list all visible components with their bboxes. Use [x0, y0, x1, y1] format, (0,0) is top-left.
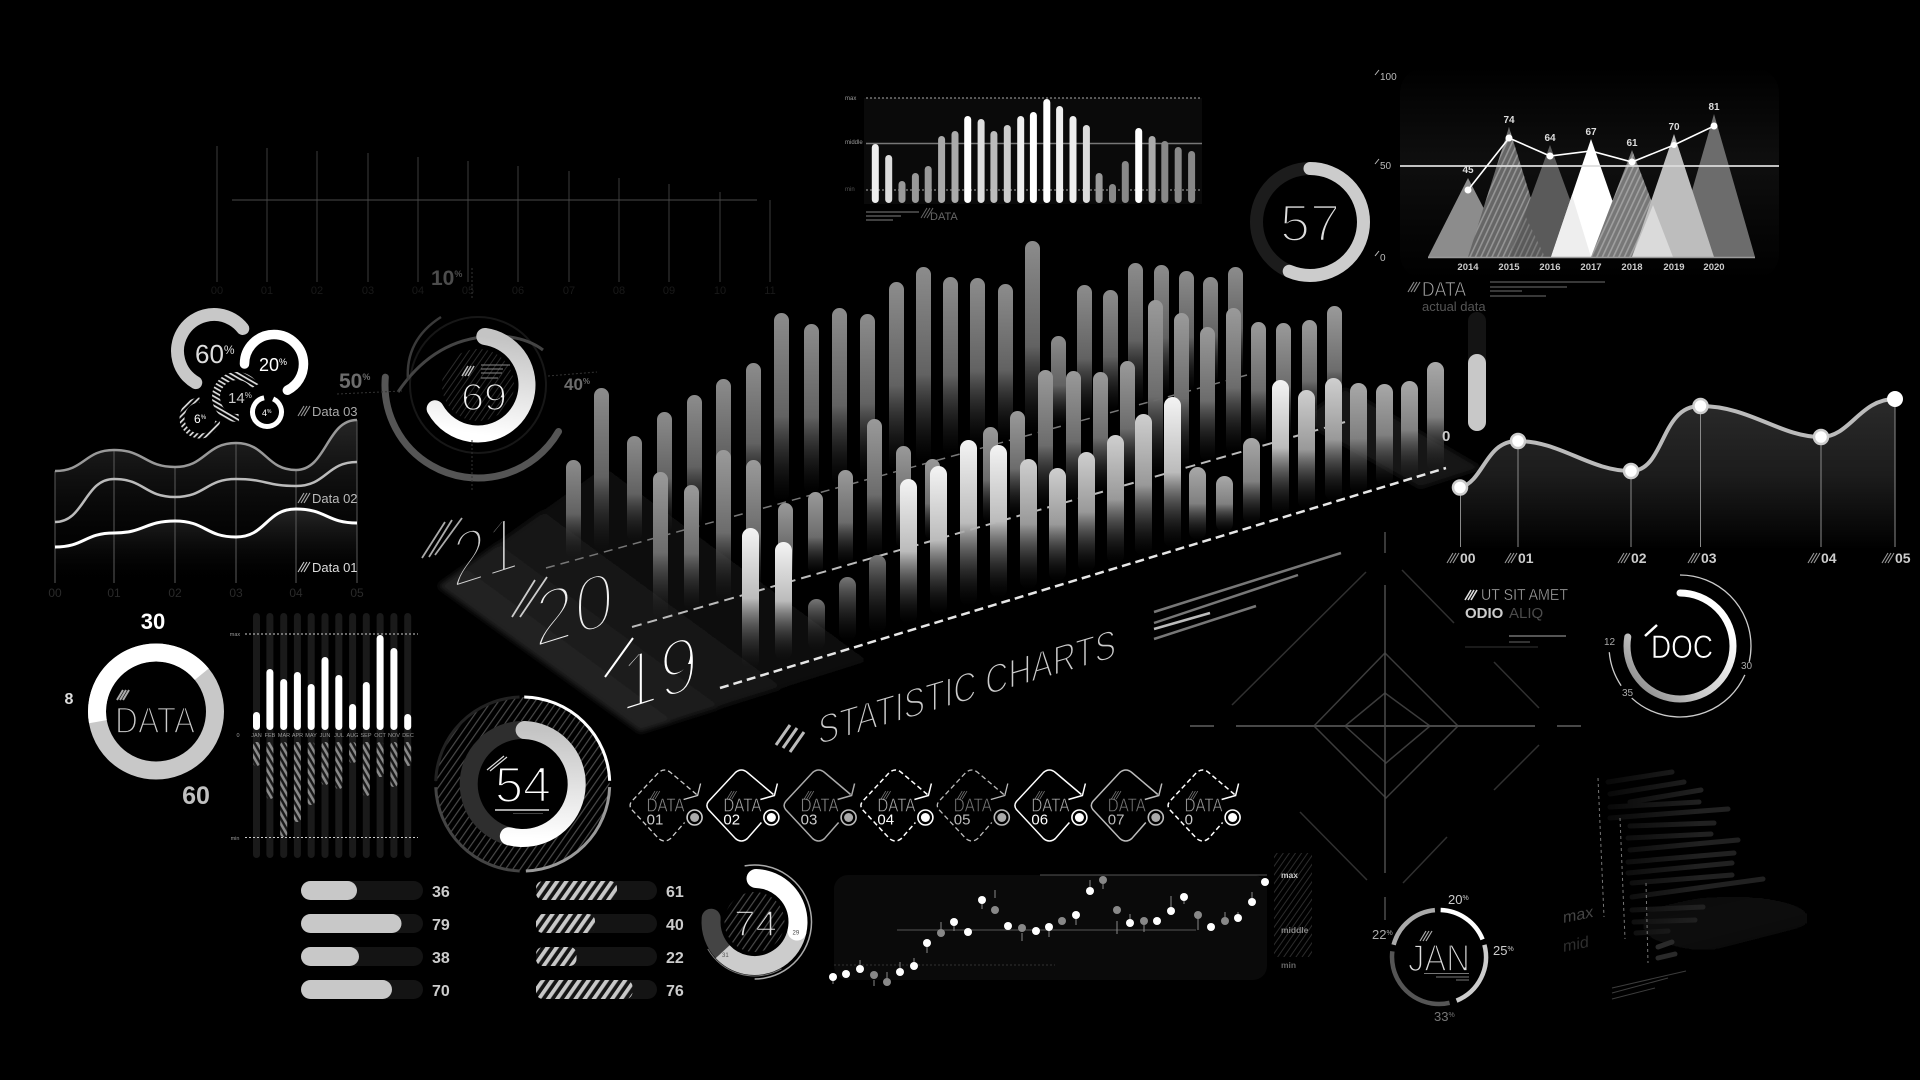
- right area line chart: 01: [1518, 550, 1534, 566]
- gauge 74: 31: [722, 953, 729, 959]
- data diamond 05: [937, 770, 1009, 841]
- triangle chart axis labels: 0: [1380, 253, 1386, 264]
- triangle chart panel: 2018: [1621, 262, 1643, 273]
- vertical pill gauge: [1442, 312, 1486, 445]
- title: statistic charts: [776, 620, 1116, 754]
- horizontal progress bars, solid: 70: [432, 983, 450, 1000]
- donut cluster: 60, 20, 14, 6, 4 percent: 6: [194, 412, 201, 426]
- DATA ring gauge with 30, 8, 60: 60: [182, 782, 210, 810]
- gauge 54: 54: [495, 757, 551, 813]
- 3D bar chart: middle axis dashed line: [632, 422, 1345, 627]
- horizontal progress bars, hatched: 22: [666, 950, 684, 967]
- data diamond 08: [1168, 770, 1240, 841]
- scatter candlestick chart: max: [1281, 870, 1298, 880]
- data diamond 06: DATA: [1031, 796, 1069, 816]
- gauge 69 with percent labels: 50: [339, 370, 362, 393]
- wave line chart with three data series: 02: [168, 586, 182, 600]
- year label 21: [422, 497, 520, 607]
- background grid with vertical timeline lines: 02: [311, 285, 323, 297]
- background grid with vertical timeline lines: 11: [764, 285, 776, 297]
- triangle chart panel: 2016: [1539, 262, 1561, 273]
- data diamond 01: [630, 770, 702, 841]
- horizontal progress bars, hatched: 61: [666, 884, 684, 901]
- background grid with vertical timeline lines: 06: [512, 285, 524, 297]
- donut cluster: 60, 20, 14, 6, 4 percent: %: [201, 415, 207, 421]
- right area line chart: 04: [1821, 550, 1837, 566]
- horizontal progress bars, solid: 38: [432, 950, 450, 967]
- radar diamond chart: [1190, 532, 1581, 920]
- background grid with vertical timeline lines: 00: [211, 285, 223, 297]
- scatter candlestick chart: middle: [1281, 925, 1309, 935]
- 3D bar chart: middle row: [653, 300, 1342, 619]
- decorative title text lines: [1154, 553, 1341, 639]
- data diamond 03: [784, 770, 856, 841]
- triangle chart panel: 74: [1503, 115, 1515, 126]
- background grid with vertical timeline lines: [211, 146, 776, 297]
- right area line chart: 02: [1631, 550, 1647, 566]
- data diamond 02: 02: [723, 812, 740, 828]
- triangle chart panel: 81: [1708, 102, 1720, 113]
- data diamond 02: DATA: [723, 796, 761, 816]
- wave line chart with three data series: 04: [289, 586, 303, 600]
- triangle chart axis labels: [1375, 70, 1397, 264]
- JAN ring with percentages: 22: [1372, 927, 1386, 942]
- text block: ut sit amet: ODIO: [1465, 605, 1504, 622]
- JAN ring with percentages: %: [1386, 930, 1393, 937]
- monthly bar chart: APR: [292, 733, 303, 739]
- right area line chart: [1447, 391, 1911, 566]
- background grid with vertical timeline lines: 09: [663, 285, 675, 297]
- background grid with vertical timeline lines: 03: [362, 285, 374, 297]
- top center bar chart panel: DATA: [930, 211, 958, 223]
- monthly bar chart: [230, 613, 418, 858]
- data diamond 08: DATA: [1185, 796, 1223, 816]
- data diamond 05: 05: [954, 812, 970, 828]
- 3D bar chart: back row: [566, 241, 1243, 558]
- title: statistic charts: STATISTIC CHARTS: [818, 620, 1116, 754]
- background grid with vertical timeline lines: 07: [563, 285, 575, 297]
- gauge 74: [681, 848, 828, 996]
- gauge 69 with percent labels: %: [454, 269, 462, 279]
- data diamond 04: 04: [877, 812, 894, 828]
- data diamond 07: DATA: [1108, 796, 1146, 816]
- triangle chart panel: 2020: [1703, 262, 1725, 273]
- horizontal progress bars, hatched: [536, 881, 684, 1000]
- data diamond 07: 07: [1108, 812, 1124, 828]
- data diamond 07: [1091, 770, 1163, 841]
- monthly bar chart: DEC: [402, 733, 414, 739]
- gauge 69 with percent labels: 69: [461, 377, 507, 419]
- scatter candlestick chart: min: [1281, 960, 1296, 970]
- triangle chart axis labels: 100: [1380, 72, 1397, 83]
- DATA ring gauge with 30, 8, 60: [65, 609, 224, 810]
- triangle chart panel: 2017: [1580, 262, 1602, 273]
- top center bar chart panel: [845, 96, 1202, 223]
- donut cluster: 60, 20, 14, 6, 4 percent: 4: [262, 408, 267, 418]
- right area line chart: 00: [1460, 550, 1476, 566]
- donut cluster: 60, 20, 14, 6, 4 percent: %: [245, 391, 252, 400]
- background grid with vertical timeline lines: 01: [261, 285, 273, 297]
- monthly bar chart: MAR: [278, 733, 290, 739]
- DOC ring gauge: 12: [1604, 637, 1616, 648]
- donut cluster: 60, 20, 14, 6, 4 percent: %: [279, 357, 287, 367]
- donut cluster: 60, 20, 14, 6, 4 percent: %: [267, 409, 272, 415]
- perspective hidden bar chart bottom right: [1537, 772, 1920, 999]
- monthly bar chart: FEB: [265, 733, 276, 739]
- vertical pill gauge: 0: [1442, 428, 1450, 445]
- data diamond 08: 0: [1185, 812, 1193, 828]
- wave line chart with three data series: Data 03: [312, 404, 358, 419]
- 3D bar chart: front axis dashed line: [720, 468, 1446, 688]
- right area line chart: 05: [1895, 550, 1911, 566]
- gauge 69 with percent labels: 10: [431, 267, 454, 290]
- background grid with vertical timeline lines: 10: [714, 285, 726, 297]
- wave line chart with three data series: 05: [350, 586, 364, 600]
- monthly bar chart: JAN: [251, 733, 262, 739]
- data caption: actual data: actual data: [1422, 299, 1486, 314]
- JAN ring with percentages: %: [1448, 1012, 1455, 1019]
- year label 21: 21: [452, 497, 520, 607]
- wave line chart with three data series: Data 01: [312, 560, 358, 575]
- donut cluster: 60, 20, 14, 6, 4 percent: 20: [259, 355, 279, 375]
- horizontal progress bars, hatched: 76: [666, 983, 684, 1000]
- triangle chart panel: 64: [1544, 133, 1556, 144]
- perspective hidden bar chart bottom right: mid: [1563, 933, 1589, 956]
- year label 19: 19: [620, 616, 698, 731]
- horizontal progress bars, solid: 79: [432, 917, 450, 934]
- wave line chart with three data series: 01: [107, 586, 121, 600]
- horizontal progress bars, solid: 36: [432, 884, 450, 901]
- gauge 54: [433, 694, 613, 874]
- DATA ring gauge with 30, 8, 60: 8: [65, 691, 74, 708]
- wave line chart with three data series: [48, 404, 364, 600]
- wave line chart with three data series: Data 02: [312, 491, 358, 506]
- JAN ring with percentages: %: [1507, 946, 1514, 953]
- gauge 69 with percent labels: %: [583, 377, 590, 386]
- DOC ring gauge: 30: [1741, 661, 1753, 672]
- triangle chart panel: 61: [1626, 138, 1638, 149]
- triangle chart panel: 2014: [1457, 262, 1479, 273]
- data diamond 04: DATA: [877, 796, 915, 816]
- monthly bar chart: MAY: [305, 733, 317, 739]
- gauge 69 with percent labels: [337, 258, 605, 512]
- triangle chart panel: 70: [1668, 122, 1680, 133]
- top center bar chart panel: max: [845, 96, 856, 102]
- background grid with vertical timeline lines: 08: [613, 285, 625, 297]
- year label 20: 20: [534, 553, 614, 666]
- monthly bar chart: min: [231, 836, 239, 842]
- DATA ring gauge with 30, 8, 60: DATA: [115, 700, 195, 741]
- monthly bar chart: 0: [236, 733, 240, 739]
- data diamond 03: 03: [801, 812, 817, 828]
- 3D bar chart: front row: [742, 362, 1444, 669]
- data diamond 01: 01: [647, 812, 663, 828]
- text block: ut sit amet: UT SIT AMET: [1481, 587, 1568, 604]
- background grid with vertical timeline lines: 05: [462, 285, 474, 297]
- donut cluster: 60, 20, 14, 6, 4 percent: [164, 301, 304, 439]
- top center bar chart panel: min: [845, 187, 855, 193]
- DOC ring gauge: [1581, 547, 1779, 745]
- triangle chart axis labels: 50: [1380, 161, 1392, 172]
- data caption: actual data: [1408, 279, 1605, 314]
- JAN ring with percentages: 33: [1434, 1009, 1448, 1024]
- monthly bar chart: JUN: [320, 733, 330, 739]
- right area line chart: 03: [1701, 550, 1717, 566]
- gauge 74: 29: [792, 930, 800, 936]
- perspective hidden bar chart bottom right: max: [1563, 903, 1593, 927]
- 3D bar chart: back axis dashed line: [546, 375, 1247, 568]
- JAN ring with percentages: 25: [1493, 943, 1507, 958]
- gauge 74: 74: [734, 903, 777, 944]
- background grid with vertical timeline lines: 04: [412, 285, 424, 297]
- data diamond 05: DATA: [954, 796, 992, 816]
- monthly bar chart: OCT: [374, 733, 386, 739]
- monthly bar chart: NOV: [388, 733, 400, 739]
- text block: ut sit amet: ALIQ: [1509, 605, 1543, 622]
- JAN ring with percentages: 20: [1448, 892, 1462, 907]
- wave line chart with three data series: 03: [229, 586, 243, 600]
- data caption: actual data: DATA: [1422, 279, 1467, 301]
- gauge 69 with percent labels: %: [362, 372, 370, 382]
- gauge 69 with percent labels: 40: [564, 375, 583, 394]
- donut cluster: 60, 20, 14, 6, 4 percent: %: [224, 343, 235, 357]
- triangle chart panel: [1400, 67, 1779, 280]
- JAN ring with percentages: [1372, 892, 1514, 1024]
- DATA ring gauge with 30, 8, 60: 30: [141, 609, 165, 634]
- monthly bar chart: JUL: [334, 733, 344, 739]
- donut cluster: 60, 20, 14, 6, 4 percent: 60: [195, 339, 224, 369]
- data diamond 03: DATA: [801, 796, 839, 816]
- wave line chart with three data series: 00: [48, 586, 62, 600]
- data diamond 06: 06: [1031, 812, 1048, 828]
- data diamond 04: [861, 770, 933, 841]
- DOC ring gauge: DOC: [1651, 629, 1713, 665]
- scatter candlestick chart: [829, 853, 1312, 986]
- DOC ring gauge: 35: [1622, 688, 1634, 699]
- donut cluster: 60, 20, 14, 6, 4 percent: 14: [228, 390, 245, 407]
- data diamond 06: [1015, 770, 1087, 841]
- triangle chart panel: 2019: [1663, 262, 1685, 273]
- triangle chart panel: 2015: [1498, 262, 1520, 273]
- triangle chart panel: 67: [1585, 127, 1597, 138]
- JAN ring with percentages: JAN: [1408, 938, 1470, 980]
- monthly bar chart: AUG: [347, 733, 358, 739]
- data diamond 01: DATA: [647, 796, 685, 816]
- triangle chart panel: 45: [1462, 165, 1474, 176]
- horizontal progress bars, hatched: 40: [666, 917, 684, 934]
- text block: ut sit amet: [1465, 587, 1568, 647]
- top center bar chart panel: middle: [845, 140, 863, 146]
- monthly bar chart: max: [230, 632, 240, 638]
- data diamond 02: [707, 770, 779, 841]
- gauge 57: 57: [1280, 195, 1340, 253]
- gauge 57: [1256, 168, 1364, 276]
- JAN ring with percentages: %: [1462, 895, 1469, 902]
- horizontal progress bars, solid: [301, 881, 450, 1000]
- monthly bar chart: SEP: [360, 733, 372, 739]
- 3D floor plane: [438, 388, 1482, 732]
